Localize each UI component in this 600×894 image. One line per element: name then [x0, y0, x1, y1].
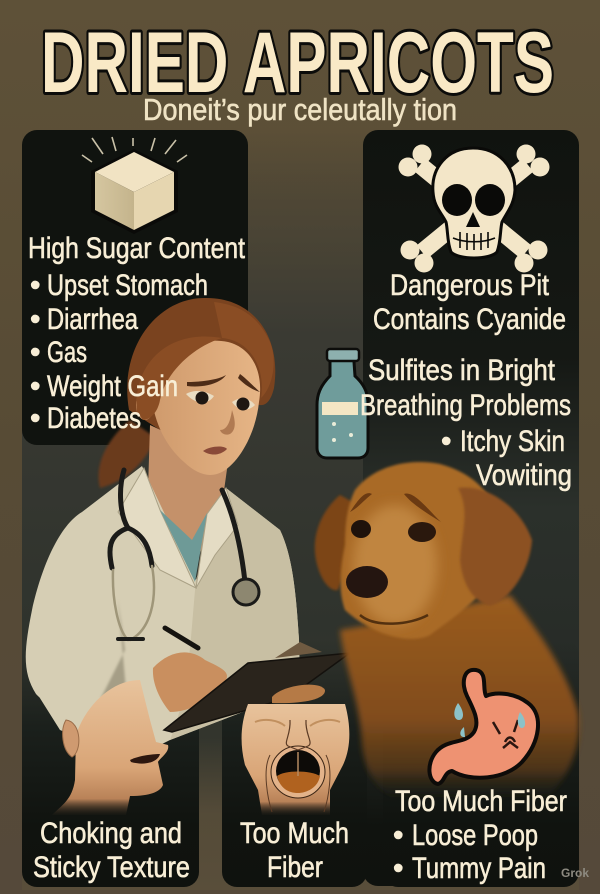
ear — [136, 390, 154, 420]
figure: front face open mouth — [242, 704, 349, 815]
pen — [165, 628, 198, 648]
clipboard — [164, 653, 350, 732]
icon: upset stomach — [429, 670, 538, 784]
panel: dangerous pit and sulfites — [363, 130, 579, 886]
mouth cavity — [271, 746, 325, 798]
text block: high sugar content: Diabetes — [47, 402, 141, 435]
supporting hand — [272, 685, 325, 703]
text block: high sugar content: High Sugar Content — [28, 232, 246, 265]
sweat drops — [454, 703, 525, 737]
hair back — [127, 298, 275, 430]
subtitle: Doneit’s pur celeutally tion — [143, 92, 457, 127]
ear — [63, 720, 79, 757]
text block: too much fiber right: • — [393, 852, 404, 885]
text block: sulfites: Itchy Skin — [460, 425, 565, 458]
text block: sulfites — [360, 354, 572, 492]
closed eyes — [255, 720, 340, 726]
clipboard clip — [275, 642, 322, 658]
sleeve cuff — [38, 678, 168, 760]
panel: high sugar content — [22, 130, 248, 445]
text block: high sugar content: • — [30, 336, 41, 369]
text block: high sugar content: • — [30, 303, 41, 336]
text block: too much fiber right: • — [393, 819, 404, 852]
mouth — [203, 447, 227, 455]
stethoscope — [110, 470, 245, 640]
icon: bottle — [317, 349, 368, 458]
ponytail — [98, 420, 156, 488]
watermark: Grok — [561, 866, 589, 880]
icon: sugar cube — [82, 137, 187, 234]
neck — [148, 425, 228, 568]
figure: dog — [315, 462, 579, 800]
nose lines — [286, 720, 310, 750]
text block: dangerous pit: Dangerous Pit — [390, 269, 550, 302]
text block: dangerous pit — [373, 269, 566, 336]
text block: high sugar content: Gas — [47, 336, 87, 369]
hair front — [137, 302, 274, 420]
open mouth — [130, 754, 160, 764]
writing hand — [153, 652, 227, 712]
figure: veterinarian — [26, 298, 350, 760]
panel: too much fiber right — [383, 640, 579, 887]
face — [151, 341, 260, 475]
text block: too much fiber right: Too Much Fiber — [395, 785, 567, 818]
panel: too much fiber middle — [222, 640, 367, 887]
collar — [118, 468, 238, 588]
icon: skull and crossbones — [398, 144, 550, 272]
text block: choking: Sticky Texture — [33, 851, 190, 884]
dog eyes — [351, 520, 371, 538]
text block: high sugar content: Upset Stomach — [47, 269, 208, 302]
text block: high sugar content: • — [30, 402, 41, 435]
text block: too much fiber right: Loose Poop — [412, 819, 538, 852]
text block: too much fiber right — [393, 785, 567, 885]
text block: too much fiber middle: Fiber — [267, 851, 323, 884]
text block: too much fiber middle: Too Much — [240, 817, 349, 850]
dog right ear — [458, 488, 532, 606]
stomach face — [493, 720, 518, 748]
figure: profile head — [52, 680, 168, 815]
text block: high sugar content: • — [30, 370, 41, 403]
lab coat — [26, 466, 300, 750]
dog body — [340, 595, 579, 800]
text block: sulfites: • — [441, 425, 452, 458]
dog nose — [346, 566, 388, 598]
text block: sulfites: Sulfites in Bright — [368, 354, 556, 387]
text block: too much fiber right: Tummy Pain — [412, 852, 546, 885]
text block: high sugar content: • — [30, 269, 41, 302]
dog face light — [353, 505, 437, 625]
coat shading — [170, 488, 300, 740]
scrubs — [160, 510, 207, 582]
dog mouth — [360, 615, 428, 624]
text block: high sugar content — [28, 232, 246, 435]
central dark backdrop — [22, 130, 579, 890]
dog head — [340, 462, 497, 639]
text block: high sugar content: Diarrhea — [47, 303, 138, 336]
panel: choking — [22, 640, 199, 887]
text block: too much fiber middle — [240, 817, 349, 884]
nose — [220, 410, 235, 435]
dog left ear — [315, 495, 358, 590]
text block: choking — [33, 817, 190, 884]
eyebrows — [187, 374, 260, 392]
stethoscope chest piece — [233, 579, 259, 605]
text block: sulfites: Vowiting — [476, 459, 572, 492]
dog brows — [350, 493, 441, 522]
text block: high sugar content: Weight Gain — [47, 370, 178, 403]
text block: choking: Choking and — [40, 817, 182, 850]
eyes — [186, 391, 214, 403]
